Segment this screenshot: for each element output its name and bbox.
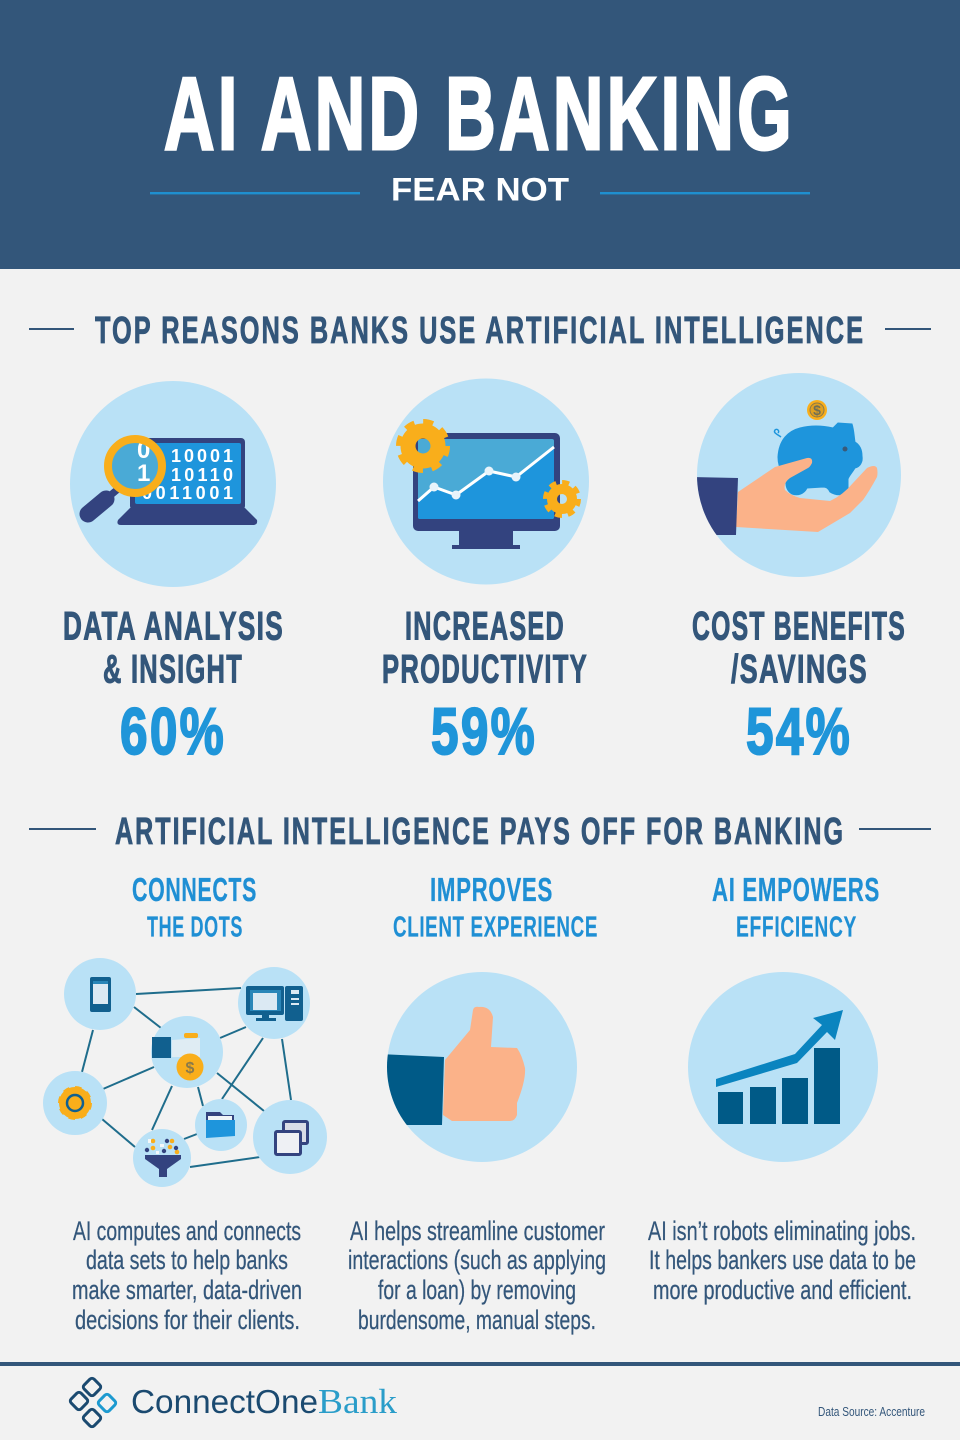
subtitle: FEAR NOT — [391, 172, 569, 208]
reason 1: data analysis: & INSIGHT — [103, 648, 243, 692]
icon: growth chart — [688, 972, 878, 1162]
icon: laptop with magnifier — [70, 381, 276, 587]
node: funnel — [133, 1129, 191, 1187]
subheading: connects the dots: CONNECTS — [132, 871, 257, 908]
icon: laptop with magnifier: 10110 — [171, 465, 233, 485]
reason 1: data analysis: 60% — [120, 694, 226, 768]
subheading: improves client experience: IMPROVES — [430, 871, 553, 908]
node: folder — [195, 1099, 247, 1151]
reason 3: cost benefits — [692, 604, 906, 768]
text: client experience description: AI helps streamline customer — [350, 1216, 605, 1246]
subheading: connects the dots: THE DOTS — [147, 912, 243, 944]
subheading: AI empowers efficiency — [712, 871, 880, 944]
node: computer — [238, 967, 310, 1039]
reason 2: productivity: INCREASED — [405, 604, 565, 648]
subheading: AI empowers efficiency: EFFICIENCY — [736, 912, 857, 944]
node: phone — [64, 958, 136, 1030]
header banner — [0, 0, 960, 269]
reason 3: cost benefits: /SAVINGS — [731, 648, 868, 692]
icon: laptop with magnifier: 10001 — [171, 446, 233, 466]
text: client experience description: interactions (such as applying — [348, 1245, 606, 1275]
text: connects the dots description: decisions for their clients. — [75, 1305, 300, 1335]
icon: hand holding piggy bank — [690, 373, 901, 577]
text: connects the dots description — [72, 1216, 302, 1335]
reason 1: data analysis: DATA ANALYSIS — [63, 604, 284, 648]
icon: laptop with magnifier: 1 — [137, 460, 150, 487]
subheading: connects the dots — [132, 871, 257, 944]
reason 2: productivity — [382, 604, 588, 768]
data source: Data Source: Accenture — [818, 1404, 925, 1419]
text: connects the dots description: make smarter, data-driven — [72, 1275, 302, 1305]
reason 2: productivity: PRODUCTIVITY — [382, 648, 588, 692]
reason 2: productivity: 59% — [431, 694, 537, 768]
footer — [0, 1362, 960, 1428]
text: connects the dots description: AI computes and connects — [73, 1216, 301, 1246]
icon: thumbs up — [380, 972, 577, 1162]
node: hand with coins — [151, 1016, 223, 1088]
logo: Bank — [318, 1382, 398, 1421]
text: client experience description: for a loan) by removing — [378, 1275, 576, 1305]
logo — [69, 1377, 398, 1428]
text: connects the dots description: data sets to help banks — [86, 1245, 288, 1275]
subheading: improves client experience — [393, 871, 598, 944]
subheading: AI empowers efficiency: AI EMPOWERS — [712, 871, 880, 908]
icon: monitor with chart and gears — [383, 378, 589, 584]
reason 1: data analysis — [63, 604, 284, 768]
node: gear — [43, 1071, 107, 1135]
node: windows — [253, 1100, 327, 1174]
text: client experience description — [348, 1216, 606, 1335]
subheading: improves client experience: CLIENT EXPERIENCE — [393, 912, 598, 944]
text: client experience description: burdensome, manual steps. — [358, 1305, 596, 1335]
logo: ConnectOne — [131, 1383, 318, 1420]
icon: laptop with magnifier: 0 — [137, 437, 150, 464]
reason 3: cost benefits: 54% — [746, 694, 852, 768]
icon: hand holding piggy bank: $ — [813, 402, 821, 418]
network diagram — [43, 958, 327, 1187]
text: efficiency description — [648, 1216, 916, 1305]
node: hand with coins: $ — [186, 1060, 195, 1077]
icon: laptop with magnifier: 0011001 — [142, 483, 233, 503]
